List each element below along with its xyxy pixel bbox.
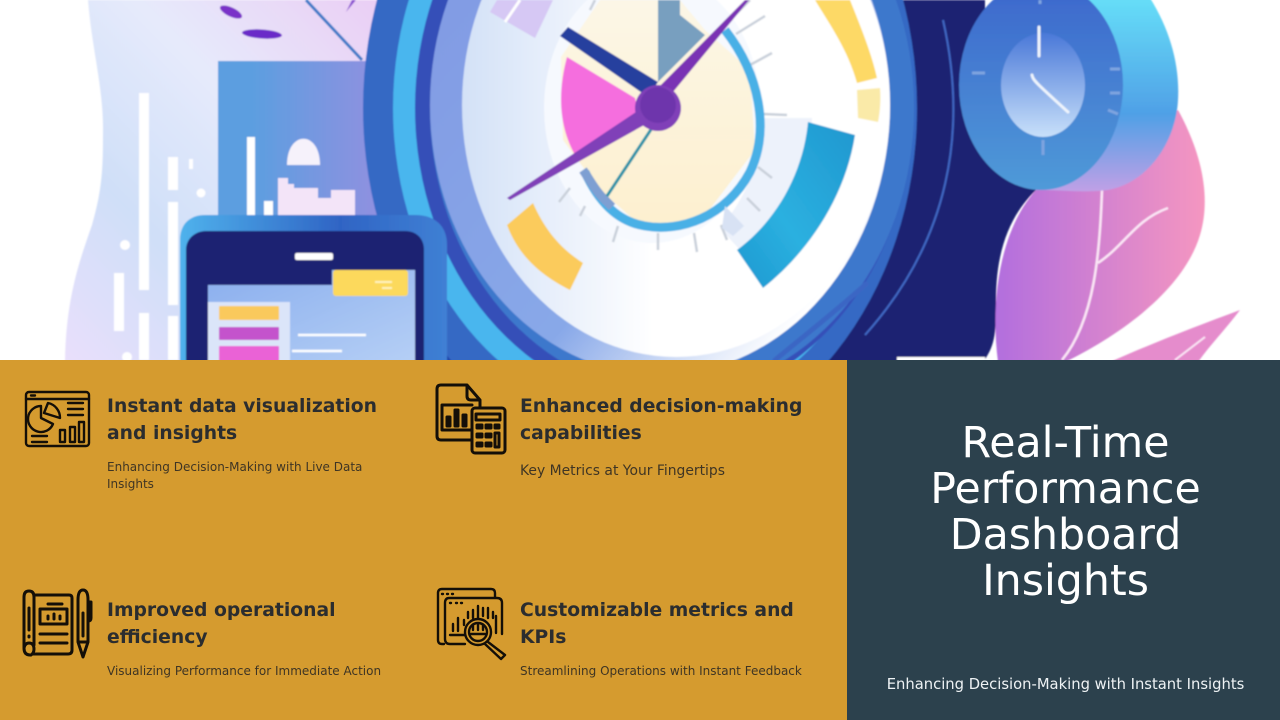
description: Insights xyxy=(107,477,154,491)
large clock body xyxy=(363,0,985,453)
blue chart card xyxy=(218,61,388,226)
navy backdrop xyxy=(740,0,1036,362)
hero illustration xyxy=(64,0,1240,360)
description: Enhancing Decision-Making with Live Data xyxy=(107,460,362,474)
subtitle: Enhancing Decision-Making with Instant Insights xyxy=(887,676,1244,693)
heading: efficiency xyxy=(107,627,208,648)
clock hands xyxy=(507,0,749,200)
heading xyxy=(520,600,794,648)
title xyxy=(930,418,1201,606)
heading xyxy=(520,396,802,444)
small clock xyxy=(959,0,1178,191)
heading xyxy=(107,600,336,648)
description: Streamlining Operations with Instant Feedback xyxy=(520,664,802,678)
icon: analytics magnifier xyxy=(436,588,506,660)
panel: key benefits xyxy=(0,360,847,720)
heading xyxy=(107,396,377,444)
title: Real-Time xyxy=(962,418,1169,468)
icon: report and calculator xyxy=(436,384,506,454)
title: Dashboard xyxy=(950,510,1181,560)
item: improved operational efficiency xyxy=(22,588,381,678)
cream gauge centre xyxy=(561,0,760,236)
description xyxy=(107,460,362,491)
heading: Instant data visualization xyxy=(107,396,377,417)
icon: notebook and pen xyxy=(22,588,92,658)
white data bars xyxy=(114,93,206,362)
clock face details xyxy=(490,0,880,290)
heading: Improved operational xyxy=(107,600,336,621)
tablet xyxy=(180,215,447,362)
heading: KPIs xyxy=(520,627,566,648)
description: Visualizing Performance for Immediate Action xyxy=(107,664,381,678)
title: Insights xyxy=(982,556,1149,606)
item: enhanced decision-making xyxy=(436,384,802,479)
purple accents and branch xyxy=(218,0,362,60)
dial ticks xyxy=(559,0,787,252)
heading: and insights xyxy=(107,423,237,444)
background blob xyxy=(65,0,420,362)
description: Key Metrics at Your Fingertips xyxy=(520,463,725,479)
item: instant data visualization xyxy=(24,390,377,491)
title: Performance xyxy=(930,464,1201,514)
panel: title xyxy=(847,360,1280,720)
heading: Customizable metrics and xyxy=(520,600,794,621)
item: customizable metrics xyxy=(436,588,802,678)
leaves xyxy=(995,110,1240,362)
icon: dashboard window xyxy=(24,390,90,448)
heading: capabilities xyxy=(520,423,642,444)
heading: Enhanced decision-making xyxy=(520,396,802,417)
